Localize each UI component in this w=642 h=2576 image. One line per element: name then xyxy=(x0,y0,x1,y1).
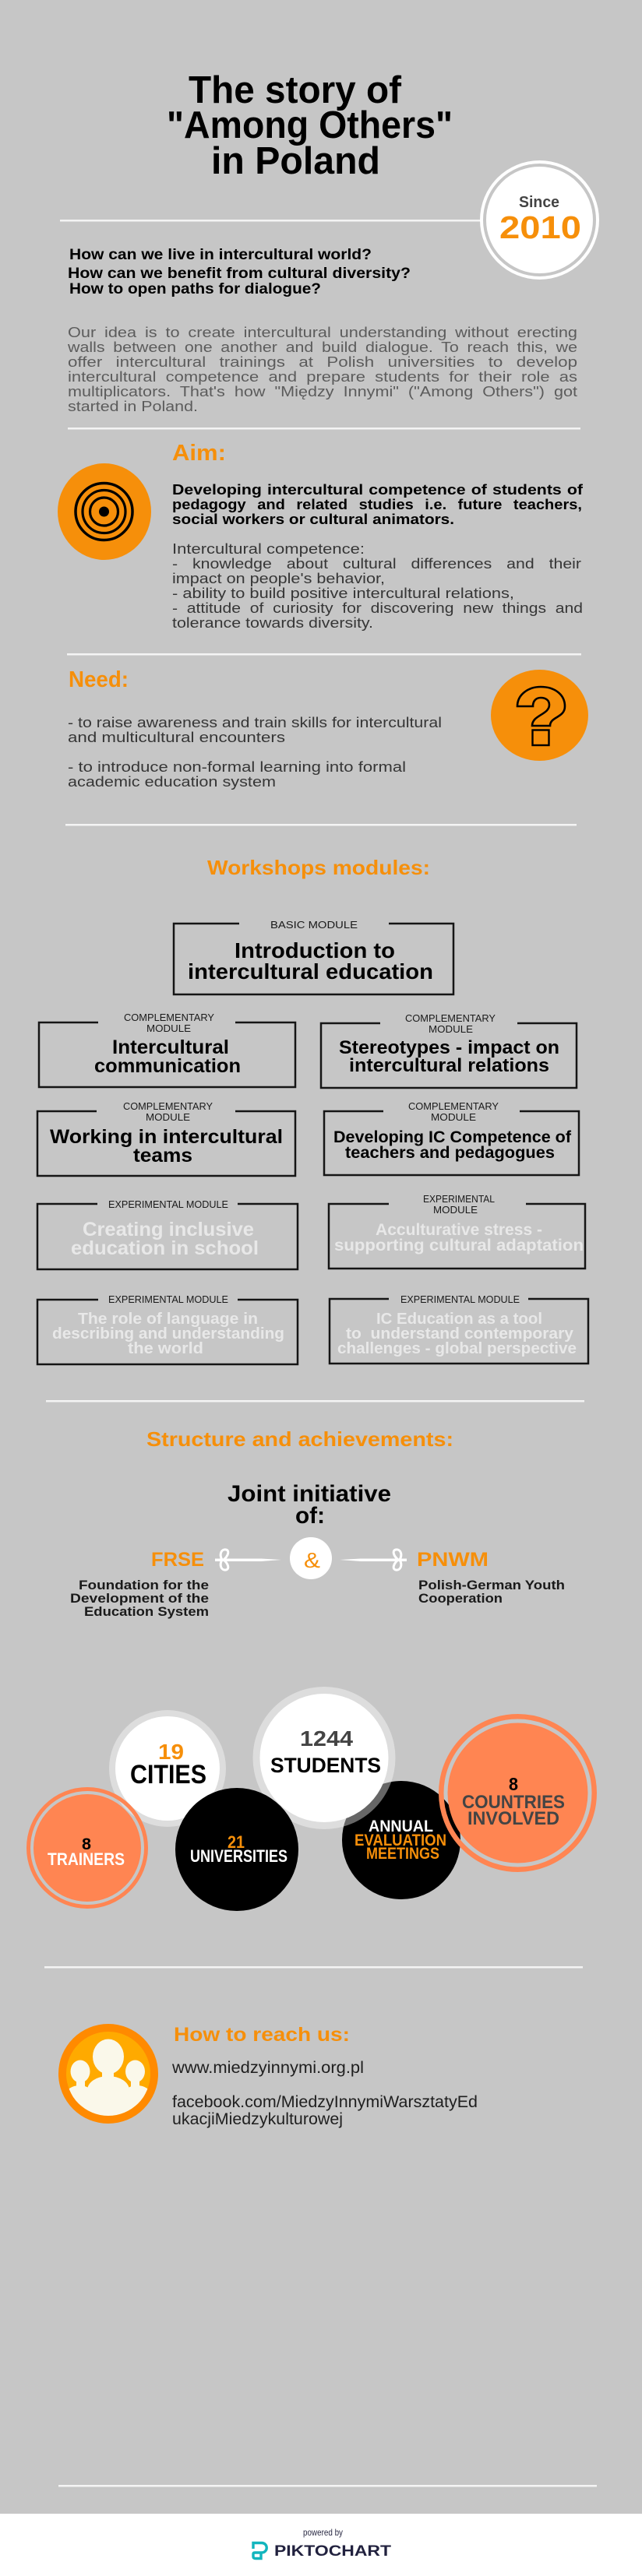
stat: 21 universities: 21 xyxy=(228,1832,245,1852)
module box: role of language: the world xyxy=(128,1340,203,1357)
intercultural competence list: - attitude of curiosity for discovering new things and xyxy=(172,600,583,616)
intercultural competence list: - ability to build positive intercultural relations, xyxy=(172,586,514,601)
module box: acculturative stress: Acculturative stress - xyxy=(376,1221,542,1239)
guiding questions: How to open paths for dialogue? xyxy=(69,281,321,297)
icon: group of people xyxy=(58,2024,158,2126)
module box: role of language xyxy=(37,1293,298,1364)
stat: 21 universities xyxy=(175,1788,298,1911)
module box: creating inclusive education: Creating inclusive xyxy=(83,1219,254,1240)
module box: developing IC competence: COMPLEMENTARY xyxy=(408,1100,499,1112)
heading: joint initiative xyxy=(228,1481,391,1529)
intro paragraph: offer intercultural trainings at Polish universities to develop xyxy=(68,354,577,370)
module box: acculturative stress xyxy=(329,1193,585,1269)
module box: working in intercultural teams: MODULE xyxy=(146,1111,190,1123)
intro paragraph: Our idea is to create intercultural understanding without erecting xyxy=(68,325,577,340)
module box: creating inclusive education xyxy=(37,1198,298,1269)
stat: 8 trainers: TRAINERS xyxy=(48,1849,125,1869)
contact links: facebook.com/MiedzyInnymiWarsztatyEd xyxy=(172,2093,478,2111)
module box: acculturative stress: MODULE xyxy=(433,1204,478,1216)
stat: 21 universities: UNIVERSITIES xyxy=(190,1846,287,1866)
heading: joint initiative: of: xyxy=(295,1503,325,1529)
footer: powered by piktochart: PIKTOCHART xyxy=(274,2543,391,2560)
stat: annual evaluation meetings xyxy=(342,1781,460,1899)
stat: 19 cities: 19 xyxy=(158,1740,184,1764)
contact links: www.miedzyinnymi.org.pl xyxy=(171,2059,364,2077)
partner: PNWM: Cooperation xyxy=(418,1591,503,1606)
module box: stereotypes: intercultural relations xyxy=(349,1055,549,1076)
module box: stereotypes: Stereotypes - impact on xyxy=(339,1037,559,1058)
stat: 1244 students xyxy=(252,1687,396,1829)
arrow: left to FRSE xyxy=(215,1550,281,1570)
stat: 8 trainers xyxy=(28,1789,146,1906)
module box: stereotypes: COMPLEMENTARY xyxy=(405,1012,496,1024)
heading: how to reach us: How to reach us: xyxy=(174,2024,350,2046)
module box: intercultural communication: COMPLEMENTARY xyxy=(124,1012,214,1023)
footer: powered by piktochart xyxy=(253,2527,391,2560)
intro paragraph: multiplicators. That's how "Między Innymi" ("Among Others") got xyxy=(68,384,577,399)
module box: developing IC competence: teachers and pedagogues xyxy=(345,1144,555,1162)
module box: basic xyxy=(174,919,453,994)
guiding questions: How can we live in intercultural world? xyxy=(69,247,372,263)
module box: working in intercultural teams: COMPLEMENTARY xyxy=(123,1100,213,1112)
module box: developing IC competence: Developing IC Competence of xyxy=(333,1128,572,1146)
intercultural competence list xyxy=(172,541,583,631)
partner: FRSE: Development of the xyxy=(70,1591,209,1606)
partner: PNWM: Polish-German Youth xyxy=(418,1578,565,1592)
module box: IC education as a tool: IC Education as a tool xyxy=(376,1311,542,1328)
stat: 1244 students: 1244 xyxy=(300,1726,353,1751)
icon: question mark xyxy=(491,670,588,761)
intercultural competence list: - knowledge about cultural differences and their xyxy=(172,556,581,572)
title: "Among Others" xyxy=(167,104,453,146)
module box: IC education as a tool xyxy=(330,1293,588,1364)
partner: FRSE: Foundation for the xyxy=(79,1578,209,1592)
footer: powered by piktochart: powered by xyxy=(303,2527,343,2538)
module box: working in intercultural teams: Working in intercultural xyxy=(50,1126,283,1148)
module box: IC education as a tool: EXPERIMENTAL MODULE xyxy=(400,1293,520,1305)
module box: basic: Introduction to xyxy=(235,938,395,962)
module box: stereotypes: MODULE xyxy=(429,1023,473,1035)
stat: 19 cities: CITIES xyxy=(130,1760,206,1789)
partner: FRSE: FRSE xyxy=(151,1549,204,1571)
partner: FRSE: Education System xyxy=(84,1604,209,1619)
intercultural competence list: impact on people's behavior, xyxy=(172,571,385,586)
stat: 19 cities xyxy=(109,1710,226,1827)
need list: - to raise awareness and train skills for intercultural xyxy=(68,715,442,730)
stat: 1244 students: STUDENTS xyxy=(270,1754,381,1777)
arrow: right to PNWM xyxy=(340,1550,407,1570)
intro paragraph: intercultural competence and prepare students for their role as xyxy=(68,369,577,385)
stat: annual evaluation meetings: ANNUAL xyxy=(369,1818,433,1835)
module box: intercultural communication: MODULE xyxy=(146,1022,191,1034)
module box: basic: intercultural education xyxy=(188,959,433,984)
ampersand circle xyxy=(290,1537,332,1579)
need list: - to introduce non-formal learning into formal xyxy=(68,759,406,775)
intro paragraph: walls between one another and build dialogue. To reach this, we xyxy=(67,340,577,355)
heading: workshops modules: Workshops modules: xyxy=(207,856,430,879)
stat: 8 trainers: 8 xyxy=(82,1835,91,1853)
icon: target xyxy=(58,463,151,560)
heading: need: Need: xyxy=(69,667,129,692)
partner: PNWM xyxy=(417,1549,565,1606)
heading: aim: Aim: xyxy=(172,441,226,466)
need list xyxy=(68,715,442,790)
stat: annual evaluation meetings: MEETINGS xyxy=(366,1845,439,1863)
module box: working in intercultural teams: teams xyxy=(133,1145,192,1167)
stat: 8 countries involved xyxy=(441,1716,594,1870)
heading: structure and achievements: Structure and achievements: xyxy=(146,1427,453,1451)
badge: since 2010: Since xyxy=(519,194,559,211)
module box: creating inclusive education: education in school xyxy=(71,1237,259,1259)
intercultural competence list: tolerance towards diversity. xyxy=(172,615,373,631)
contact links xyxy=(171,2059,478,2128)
guiding questions: How can we benefit from cultural diversity? xyxy=(68,266,411,282)
aim statement xyxy=(172,482,584,527)
aim statement: pedagogy and related studies i.e. future teachers, xyxy=(172,497,582,512)
module box: role of language: describing and understanding xyxy=(52,1325,284,1343)
ampersand circle: & xyxy=(304,1548,320,1572)
stat: annual evaluation meetings: EVALUATION xyxy=(355,1832,446,1849)
module box: creating inclusive education: EXPERIMENTAL MODULE xyxy=(108,1198,228,1210)
aim statement: Developing intercultural competence of students of xyxy=(172,482,584,498)
module box: IC education as a tool: to understand contemporary xyxy=(346,1325,574,1343)
guiding questions xyxy=(68,247,411,297)
stat: 8 countries involved: 8 xyxy=(509,1774,518,1794)
need list: academic education system xyxy=(68,774,276,790)
module box: working in intercultural teams xyxy=(37,1100,295,1176)
title xyxy=(167,69,453,182)
module box: IC education as a tool: challenges - global perspective xyxy=(337,1340,577,1357)
module box: intercultural communication: communication xyxy=(94,1055,241,1077)
intro paragraph xyxy=(67,325,577,414)
aim statement: social workers or cultural animators. xyxy=(172,512,454,527)
heading: joint initiative: Joint initiative xyxy=(228,1481,391,1507)
module box: intercultural communication xyxy=(39,1012,295,1087)
intercultural competence list: Intercultural competence: xyxy=(172,541,365,557)
module box: developing IC competence: MODULE xyxy=(431,1111,476,1123)
intro paragraph: started in Poland. xyxy=(68,399,198,414)
title: in Poland xyxy=(211,140,380,182)
stat: 8 countries involved: COUNTRIES xyxy=(462,1792,565,1813)
module box: basic: BASIC MODULE xyxy=(270,919,358,931)
badge: since 2010 xyxy=(480,160,599,280)
title: The story of xyxy=(189,69,402,111)
module box: acculturative stress: supporting cultural adaptation xyxy=(334,1237,584,1255)
module box: intercultural communication: Intercultural xyxy=(112,1036,229,1058)
contact links: ukacjiMiedzykulturowej xyxy=(172,2110,343,2128)
need list: and multicultural encounters xyxy=(68,730,285,745)
module box: stereotypes xyxy=(321,1012,577,1088)
stat: 8 countries involved: INVOLVED xyxy=(467,1808,559,1829)
module box: developing IC competence xyxy=(324,1100,579,1175)
module box: role of language: The role of language in xyxy=(78,1311,258,1328)
partner: FRSE xyxy=(70,1549,209,1619)
module box: role of language: EXPERIMENTAL MODULE xyxy=(108,1293,228,1305)
module box: acculturative stress: EXPERIMENTAL xyxy=(423,1193,495,1205)
badge: since 2010: 2010 xyxy=(499,209,581,245)
partner: PNWM: PNWM xyxy=(417,1549,489,1571)
